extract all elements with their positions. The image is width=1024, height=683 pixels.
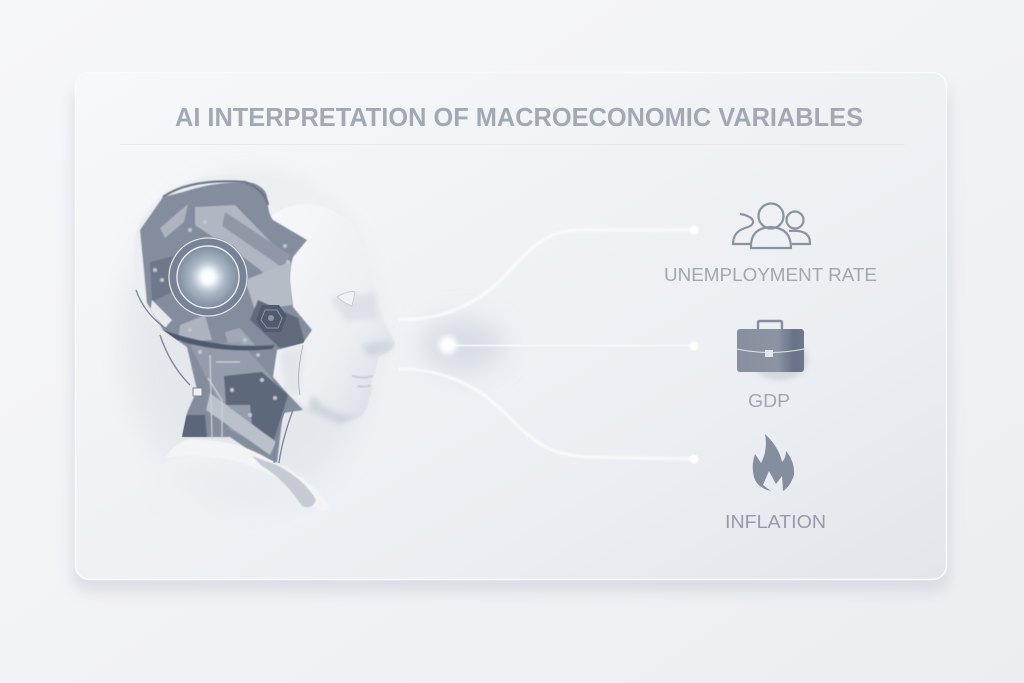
glow source <box>439 336 457 354</box>
icon: people <box>733 204 810 248</box>
infographic <box>70 72 957 599</box>
end nodes <box>690 226 698 464</box>
line: gdp <box>448 345 695 346</box>
icon: briefcase <box>737 321 808 380</box>
main glass panel <box>76 72 946 580</box>
line: inflation <box>398 369 695 459</box>
circuit section <box>140 182 312 463</box>
top cable <box>163 181 268 205</box>
robot head illustration <box>125 174 504 530</box>
collar <box>165 439 329 511</box>
icon: flame <box>753 434 794 491</box>
face shading <box>280 292 394 424</box>
face <box>270 204 395 421</box>
connector lines <box>398 226 698 464</box>
label: inflation: INFLATION <box>725 512 826 532</box>
panel shadow <box>72 86 950 592</box>
lips and jaw line <box>352 376 373 387</box>
eye <box>337 292 355 306</box>
line: unemployment <box>398 230 695 319</box>
hex socket <box>256 305 287 332</box>
shadow near face <box>420 319 504 371</box>
label: gdp: GDP <box>748 391 790 411</box>
side cables <box>136 290 293 463</box>
body <box>140 445 345 530</box>
title: AI INTERPRETATION OF MACROECONOMIC VARIABLES <box>175 102 863 132</box>
glowing lens <box>168 237 248 317</box>
label: unemployment rate: UNEMPLOYMENT RATE <box>664 265 877 285</box>
soft shadow around head <box>125 175 375 505</box>
helmet shell <box>134 174 377 350</box>
